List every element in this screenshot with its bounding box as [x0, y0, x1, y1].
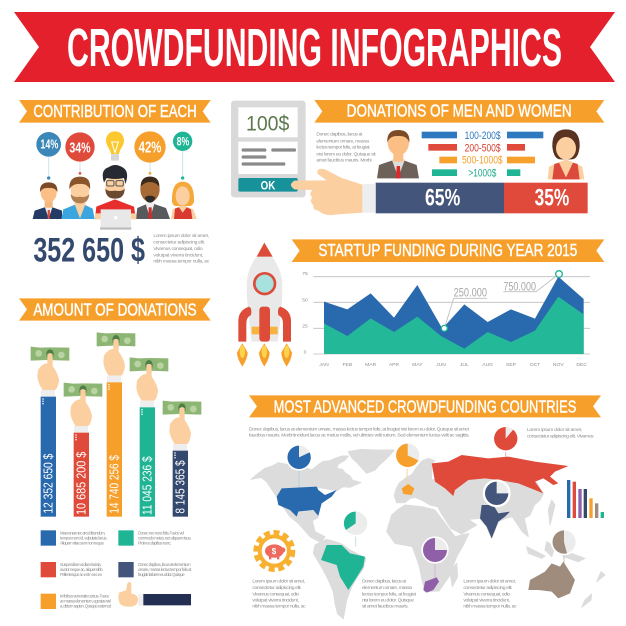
area chart: JUL [460, 362, 469, 368]
legend: navy [118, 562, 192, 577]
arm bar: navy [163, 401, 201, 517]
legend: orange: In finibus venenatis cursus. Fusce [60, 594, 110, 599]
area chart: SEP [506, 362, 517, 368]
legend: navy: feugiat nisi lorem eu dolor. Quisque [138, 572, 185, 577]
heading: contribution of each [19, 100, 211, 123]
arm bar: red [64, 383, 102, 517]
panel: donations of men and women [231, 100, 604, 215]
text block: right: nibh massa tempor nulla, ac [463, 604, 517, 610]
area chart: AUG [482, 362, 493, 368]
split bar 65 / 35 [376, 183, 588, 213]
text block: elementum ornare, massa [316, 138, 369, 144]
pointing hand [291, 169, 376, 215]
arm bar: orange [97, 332, 135, 517]
legend: green: Donec nec nunc felis. Fusce vel [138, 530, 184, 535]
percentage bubbles: 14% [40, 138, 58, 152]
intro text: Lorem ipsum dolor sit amet, [527, 427, 582, 433]
person 5 [171, 182, 197, 219]
payment tablet: OK [261, 178, 276, 192]
heading: amount of donations [19, 298, 211, 321]
legend: red: Suspendisse ut diam lacinia, [60, 562, 101, 567]
legend: blue [41, 530, 107, 546]
arm bar: blue [31, 347, 69, 517]
legend: orange [41, 594, 112, 609]
donation range bars: 500-1000$ [462, 155, 503, 167]
text block: lectus tempor felis, at feugiat [316, 145, 370, 151]
person 3 with laptop [95, 165, 136, 230]
country: USA [277, 444, 337, 517]
legend: blue: Maecenas nec arcu bibendum, [60, 530, 105, 535]
icon: gear with piggy bank: $ [272, 547, 277, 556]
intro text: Donec dapibus, lacus at elementum ornare, massa lectus tempor felis, at feugiat nisi lorem eu dolor. Quisque sit amet [249, 426, 470, 432]
text block: left: volutpat viverra tincidunt, [252, 597, 299, 603]
rocket [237, 243, 292, 367]
total amount: 352 650 $ [33, 231, 145, 269]
intro text [249, 426, 594, 440]
area chart: JUN [436, 362, 446, 368]
text block: right: Vivamus consequat, odio [463, 591, 510, 597]
area chart: APR [389, 362, 400, 368]
legend: navy: ornare, massa lectus tempor felis at [138, 567, 192, 572]
country: India [480, 479, 511, 538]
area chart: MAY [412, 362, 423, 368]
person 4 [136, 177, 170, 219]
area chart: FEB [342, 362, 353, 368]
country: Australia [528, 529, 577, 598]
country: Brazil [321, 510, 369, 590]
split bar 65 / 35: 35% [535, 185, 569, 212]
area chart: MAR [365, 362, 377, 368]
heading: contribution of each: CONTRIBUTION OF EACH [33, 101, 197, 121]
legend: green: Proin eu dapibus nunc. [138, 540, 171, 545]
area chart: 75 [302, 271, 308, 277]
text block: right [463, 579, 517, 610]
panel: amount of donations [19, 298, 211, 517]
donation range bars [422, 130, 543, 179]
legend: blue: Aliquam vitae sem non neque [60, 540, 105, 545]
text block [153, 233, 210, 265]
arm bar: green [130, 357, 168, 517]
text block: left: Vivamus consequat, odio [252, 591, 299, 597]
panel: contribution of each [19, 100, 211, 269]
text block: middle: elementum ornare, massa [362, 585, 412, 591]
icon: gear with piggy bank [256, 532, 293, 570]
panel: legend [41, 530, 192, 609]
text block: middle: lectus tempor felis, at feugiat [362, 591, 417, 597]
thumb up arm [118, 582, 191, 607]
arm bar: blue: 12 352 650 $ [41, 454, 55, 514]
legend: navy: Donec dapibus, lacus at elementum [138, 562, 191, 567]
percentage bubbles: 34% [69, 140, 91, 156]
percentage bubbles: 42% [139, 140, 162, 157]
text block: left: Lorem ipsum dolor sit amet, [252, 579, 305, 585]
area chart: 250.000 [454, 285, 487, 299]
text block: middle: nisi lorem eu dolor. Quisque [362, 597, 414, 603]
text block: middle [362, 579, 417, 610]
percentage bubbles [36, 131, 192, 180]
arm bar: navy: 8 145 365 $ [173, 460, 187, 514]
country: France [394, 442, 421, 495]
arm bar: red: 10 685 200 $ [74, 452, 88, 515]
text block: amet faucibus mauris. Morbi [316, 158, 372, 164]
legend: red: Pellentesque ac enim nec ex [60, 572, 103, 577]
legend: orange: ac massa elementum, egestas nisl [60, 599, 111, 604]
woman [548, 129, 584, 179]
area chart: 0 [304, 350, 307, 356]
panel: most advanced crowdfunding countries [249, 395, 605, 619]
heading: amount of donations: AMOUNT OF DONATIONS [33, 299, 197, 319]
intro text: faucibus mauris. Morbi tincidunt lacus ac metus mollis, vel ultricies velit rutrum. Sed elementum luctus velit ac sagittis. [249, 433, 470, 439]
legend: blue: tempus nunc id, vulputate lacus. [60, 535, 107, 540]
text block: left: nibh massa tempor nulla, ac [252, 604, 306, 610]
legend: green [118, 530, 191, 546]
donation range bars: 200-500$ [465, 142, 501, 154]
area chart: OCT [530, 362, 540, 368]
world map land [251, 449, 605, 619]
percentage bubbles: 8% [177, 135, 190, 149]
payment tablet [231, 101, 306, 197]
area chart: DEC [576, 362, 587, 368]
area chart: 750.000 [503, 280, 536, 294]
small bar chart [567, 480, 604, 518]
area chart: JAN [319, 362, 329, 368]
country: South Africa [421, 536, 449, 593]
legend: orange: a, dictum sapien. Quisque euismod [60, 604, 112, 609]
area chart: NOV [553, 362, 564, 368]
person 2 [61, 177, 95, 219]
donation range bars: 100-200$ [465, 130, 501, 142]
text block: Lorem ipsum dolor sit amet, [153, 233, 209, 239]
legend: red: auctor neque ac, aliquet nibh. [60, 567, 103, 572]
text block: left [252, 579, 306, 610]
donation range bars: >1000$ [468, 167, 496, 179]
text block: middle: Donec dapibus, lacus at [362, 579, 407, 585]
man [377, 130, 419, 178]
text block: Donec dapibus, lacus at [316, 132, 363, 138]
country: Russia [432, 425, 568, 496]
text block: middle: sit amet faucibus mauris. [362, 604, 409, 610]
text block: right: Lorem ipsum dolor sit amet, [463, 579, 516, 585]
text block: nisi lorem eu dolor. Quisque sit [316, 151, 376, 157]
area chart [302, 271, 590, 368]
text block: nibh massa tempor nulla, ac [153, 259, 210, 265]
text block: consectetur adipiscing elit. [153, 239, 205, 245]
area chart: 25 [302, 323, 308, 329]
text block: right: consectetur adipiscing elit. [463, 585, 513, 591]
text block: right: volutpat viverra tincidunt, [463, 597, 510, 603]
arm bar: green: 11 045 236 $ [140, 456, 154, 515]
text block: left: consectetur adipiscing elit. [252, 585, 302, 591]
panel: startup funding [237, 239, 604, 368]
area chart: 50 [302, 297, 308, 303]
arm bar: orange: 14 740 256 $ [107, 455, 121, 514]
split bar 65 / 35: 65% [425, 185, 460, 212]
person 1 [33, 182, 62, 219]
text block: Vivamus consequat, odio [153, 246, 203, 252]
legend: red [41, 562, 103, 577]
icon: light bulb [106, 131, 124, 161]
intro text: consectetur adipiscing elit. Vivamus [527, 434, 594, 440]
legend: green: commodo metus, nec aliquam risus. [138, 535, 191, 540]
payment tablet: 100$ [246, 111, 289, 135]
text block: volutpat viverra tincidunt, [153, 252, 203, 258]
text block [316, 132, 376, 164]
